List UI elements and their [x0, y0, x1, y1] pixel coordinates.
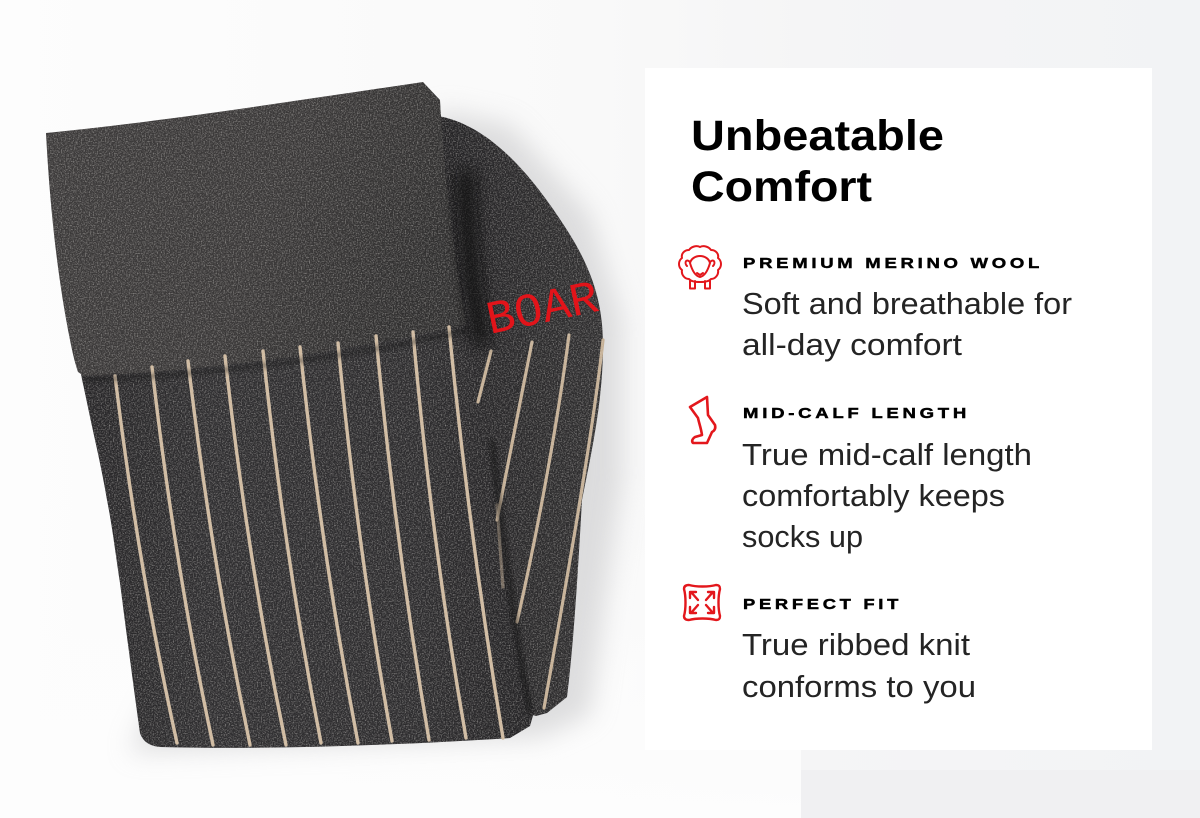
feature: mid-calf length: socks up	[742, 519, 863, 554]
label: PERFECT FIT	[743, 596, 902, 613]
description: Soft and breathable for	[742, 286, 1072, 321]
feature: mid-calf length: comfortably keeps	[742, 478, 1005, 513]
heading: Unbeatable	[691, 112, 944, 160]
sock back panel	[400, 110, 603, 716]
icon: sock outline	[690, 397, 715, 443]
pinstripes front	[115, 327, 503, 745]
photo: folded merino sock	[46, 82, 622, 752]
icon: expanding arrows	[684, 585, 720, 620]
feature: perfect fit: conforms to you	[742, 669, 976, 704]
knit texture	[46, 82, 603, 748]
feature: mid-calf length	[690, 397, 1032, 554]
brand lettering: BOAR	[482, 273, 604, 349]
sock shadow	[130, 110, 622, 752]
heading: Comfort	[691, 163, 872, 211]
sock body	[78, 300, 534, 748]
sock cuff	[46, 82, 466, 376]
pinstripes back	[478, 335, 603, 708]
label: PREMIUM MERINO WOOL	[743, 255, 1043, 272]
feature: merino wool: all-day comfort	[742, 327, 962, 362]
description: True ribbed knit	[742, 627, 970, 662]
label: MID-CALF LENGTH	[743, 405, 970, 422]
feature: merino wool	[679, 246, 1072, 362]
panel: comfort features	[645, 68, 1152, 750]
fold shadow	[466, 170, 482, 345]
feature: perfect fit	[684, 585, 976, 704]
description: True mid-calf length	[742, 437, 1032, 472]
icon: sheep	[679, 246, 721, 288]
heading	[691, 112, 944, 211]
